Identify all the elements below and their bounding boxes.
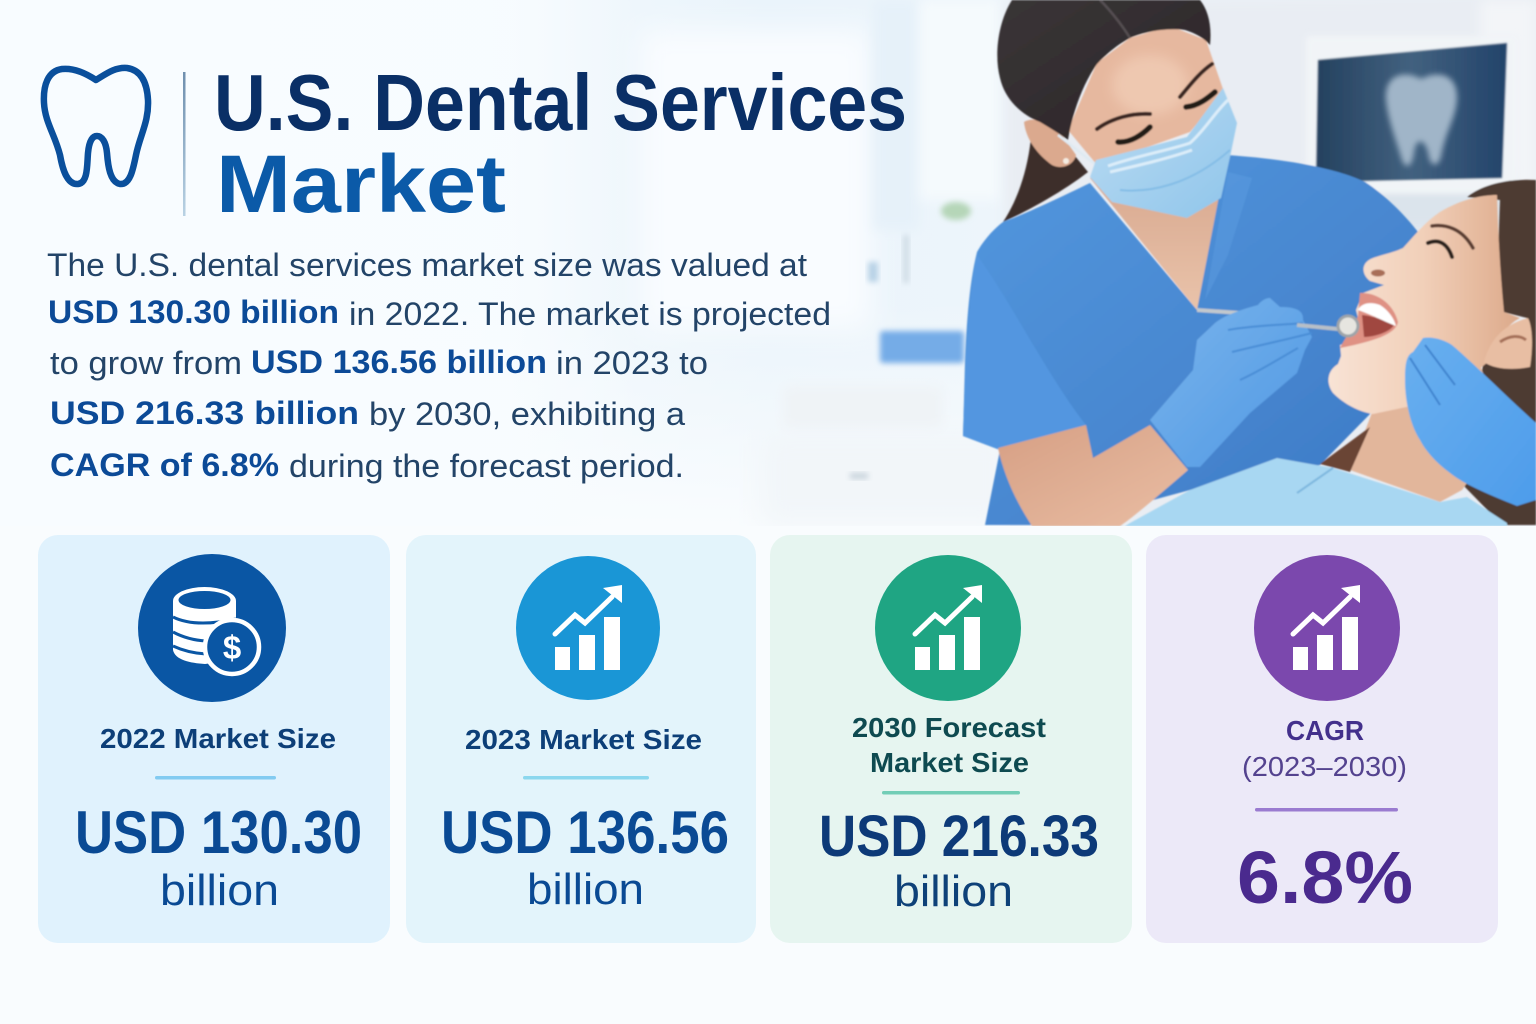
intro paragraph: The U.S. dental services market size was valued at: [47, 247, 807, 283]
value: USD 136.56: [441, 799, 729, 866]
panel: 2023 market size: billion: [527, 865, 644, 914]
title: U.S. Dental Services: [214, 58, 907, 147]
value: USD 130.30: [75, 799, 362, 866]
intro paragraph: in 2023 to: [556, 345, 708, 381]
patient hair: [1462, 180, 1536, 525]
patient drape: [1125, 458, 1507, 526]
title: Market: [216, 139, 506, 230]
label: 2022 Market Size: [100, 723, 336, 754]
value: 6.8%: [1237, 836, 1413, 919]
dentist face: [1068, 26, 1224, 165]
dentist neck: [1090, 178, 1219, 310]
patient hair behind neck: [1320, 427, 1370, 472]
panel: 2022 market size: [38, 535, 390, 943]
value: USD 216.33: [819, 804, 1099, 869]
dentist scrubs: [963, 155, 1418, 525]
patient face: [1328, 195, 1520, 414]
dental mirror head: [1336, 314, 1360, 338]
holding glove finger creases: [1228, 323, 1312, 380]
monitor with tooth x-ray: [1306, 36, 1518, 194]
patient ear detail: [1500, 336, 1526, 342]
panel: CAGR: [1146, 535, 1498, 943]
panel: 2030 forecast: billion: [894, 867, 1013, 916]
dentist earring: [1063, 158, 1069, 164]
label: Market Size: [870, 747, 1029, 778]
mask pleats: [1108, 100, 1228, 172]
patient mouth: [1340, 293, 1398, 348]
icon: coin stack with dollar: $: [223, 629, 241, 666]
intro paragraph: during the forecast period.: [289, 448, 684, 484]
patient nostril: [1371, 270, 1385, 276]
intro paragraph: USD 130.30 billion: [48, 294, 339, 330]
dentist ponytail: [1002, 142, 1089, 222]
label: [852, 712, 1046, 778]
title: [214, 58, 907, 230]
panel: 2022 market size: billion: [160, 866, 279, 915]
surgical mask: [1090, 88, 1237, 218]
dentist face highlight: [1112, 55, 1188, 115]
patient ear: [1484, 318, 1532, 369]
icon: tooth: [44, 68, 148, 184]
scrub left sleeve highlight: [964, 304, 1085, 448]
panel: CAGR: (2023–2030): [1242, 751, 1407, 782]
scrub collar highlight: [1208, 233, 1233, 292]
hair part highlight: [1100, 0, 1130, 38]
intro paragraph: USD 216.33 billion: [50, 395, 359, 431]
dentist lashes: [1118, 92, 1215, 142]
blurred clinic background: [598, 0, 1536, 526]
intro paragraph: USD 136.56 billion: [251, 344, 547, 380]
panel: 2030 forecast: [770, 535, 1132, 943]
mask lower fold: [1120, 150, 1230, 191]
mask ear loop: [1056, 133, 1093, 162]
photo: dentist treating a patient: [963, 0, 1536, 526]
icon: coin stack with dollar: [138, 554, 286, 702]
patient eye: [1428, 241, 1452, 257]
icon: growth chart: [875, 555, 1021, 701]
dentist eyes and brows: [1097, 64, 1212, 129]
intro paragraph: in 2022. The market is projected: [349, 296, 831, 332]
label: 2030 Forecast: [852, 712, 1046, 743]
intro paragraph: by 2030, exhibiting a: [369, 396, 685, 432]
dentist forearm: [998, 425, 1188, 526]
drape seam: [1297, 468, 1333, 493]
icon: growth chart: [1254, 555, 1400, 701]
mirror stem: [1297, 325, 1338, 329]
patient neck: [1350, 367, 1484, 502]
supporting glove creases: [1410, 345, 1455, 405]
label: 2023 Market Size: [465, 724, 702, 755]
icon: growth chart: [516, 556, 660, 700]
intro paragraph: CAGR of 6.8%: [50, 447, 279, 483]
intro paragraph: to grow from: [50, 345, 242, 381]
patient eye and brow: [1432, 226, 1473, 248]
panel: 2023 market size: [406, 535, 756, 943]
dental mirror handle: [1197, 310, 1240, 313]
label: CAGR: [1286, 715, 1364, 746]
intro paragraph: [47, 247, 831, 484]
holding glove: [1150, 298, 1312, 467]
title divider: [183, 72, 186, 216]
dentist ear: [1024, 120, 1076, 167]
dentist hair: [997, 0, 1211, 140]
supporting glove: [1405, 337, 1536, 506]
